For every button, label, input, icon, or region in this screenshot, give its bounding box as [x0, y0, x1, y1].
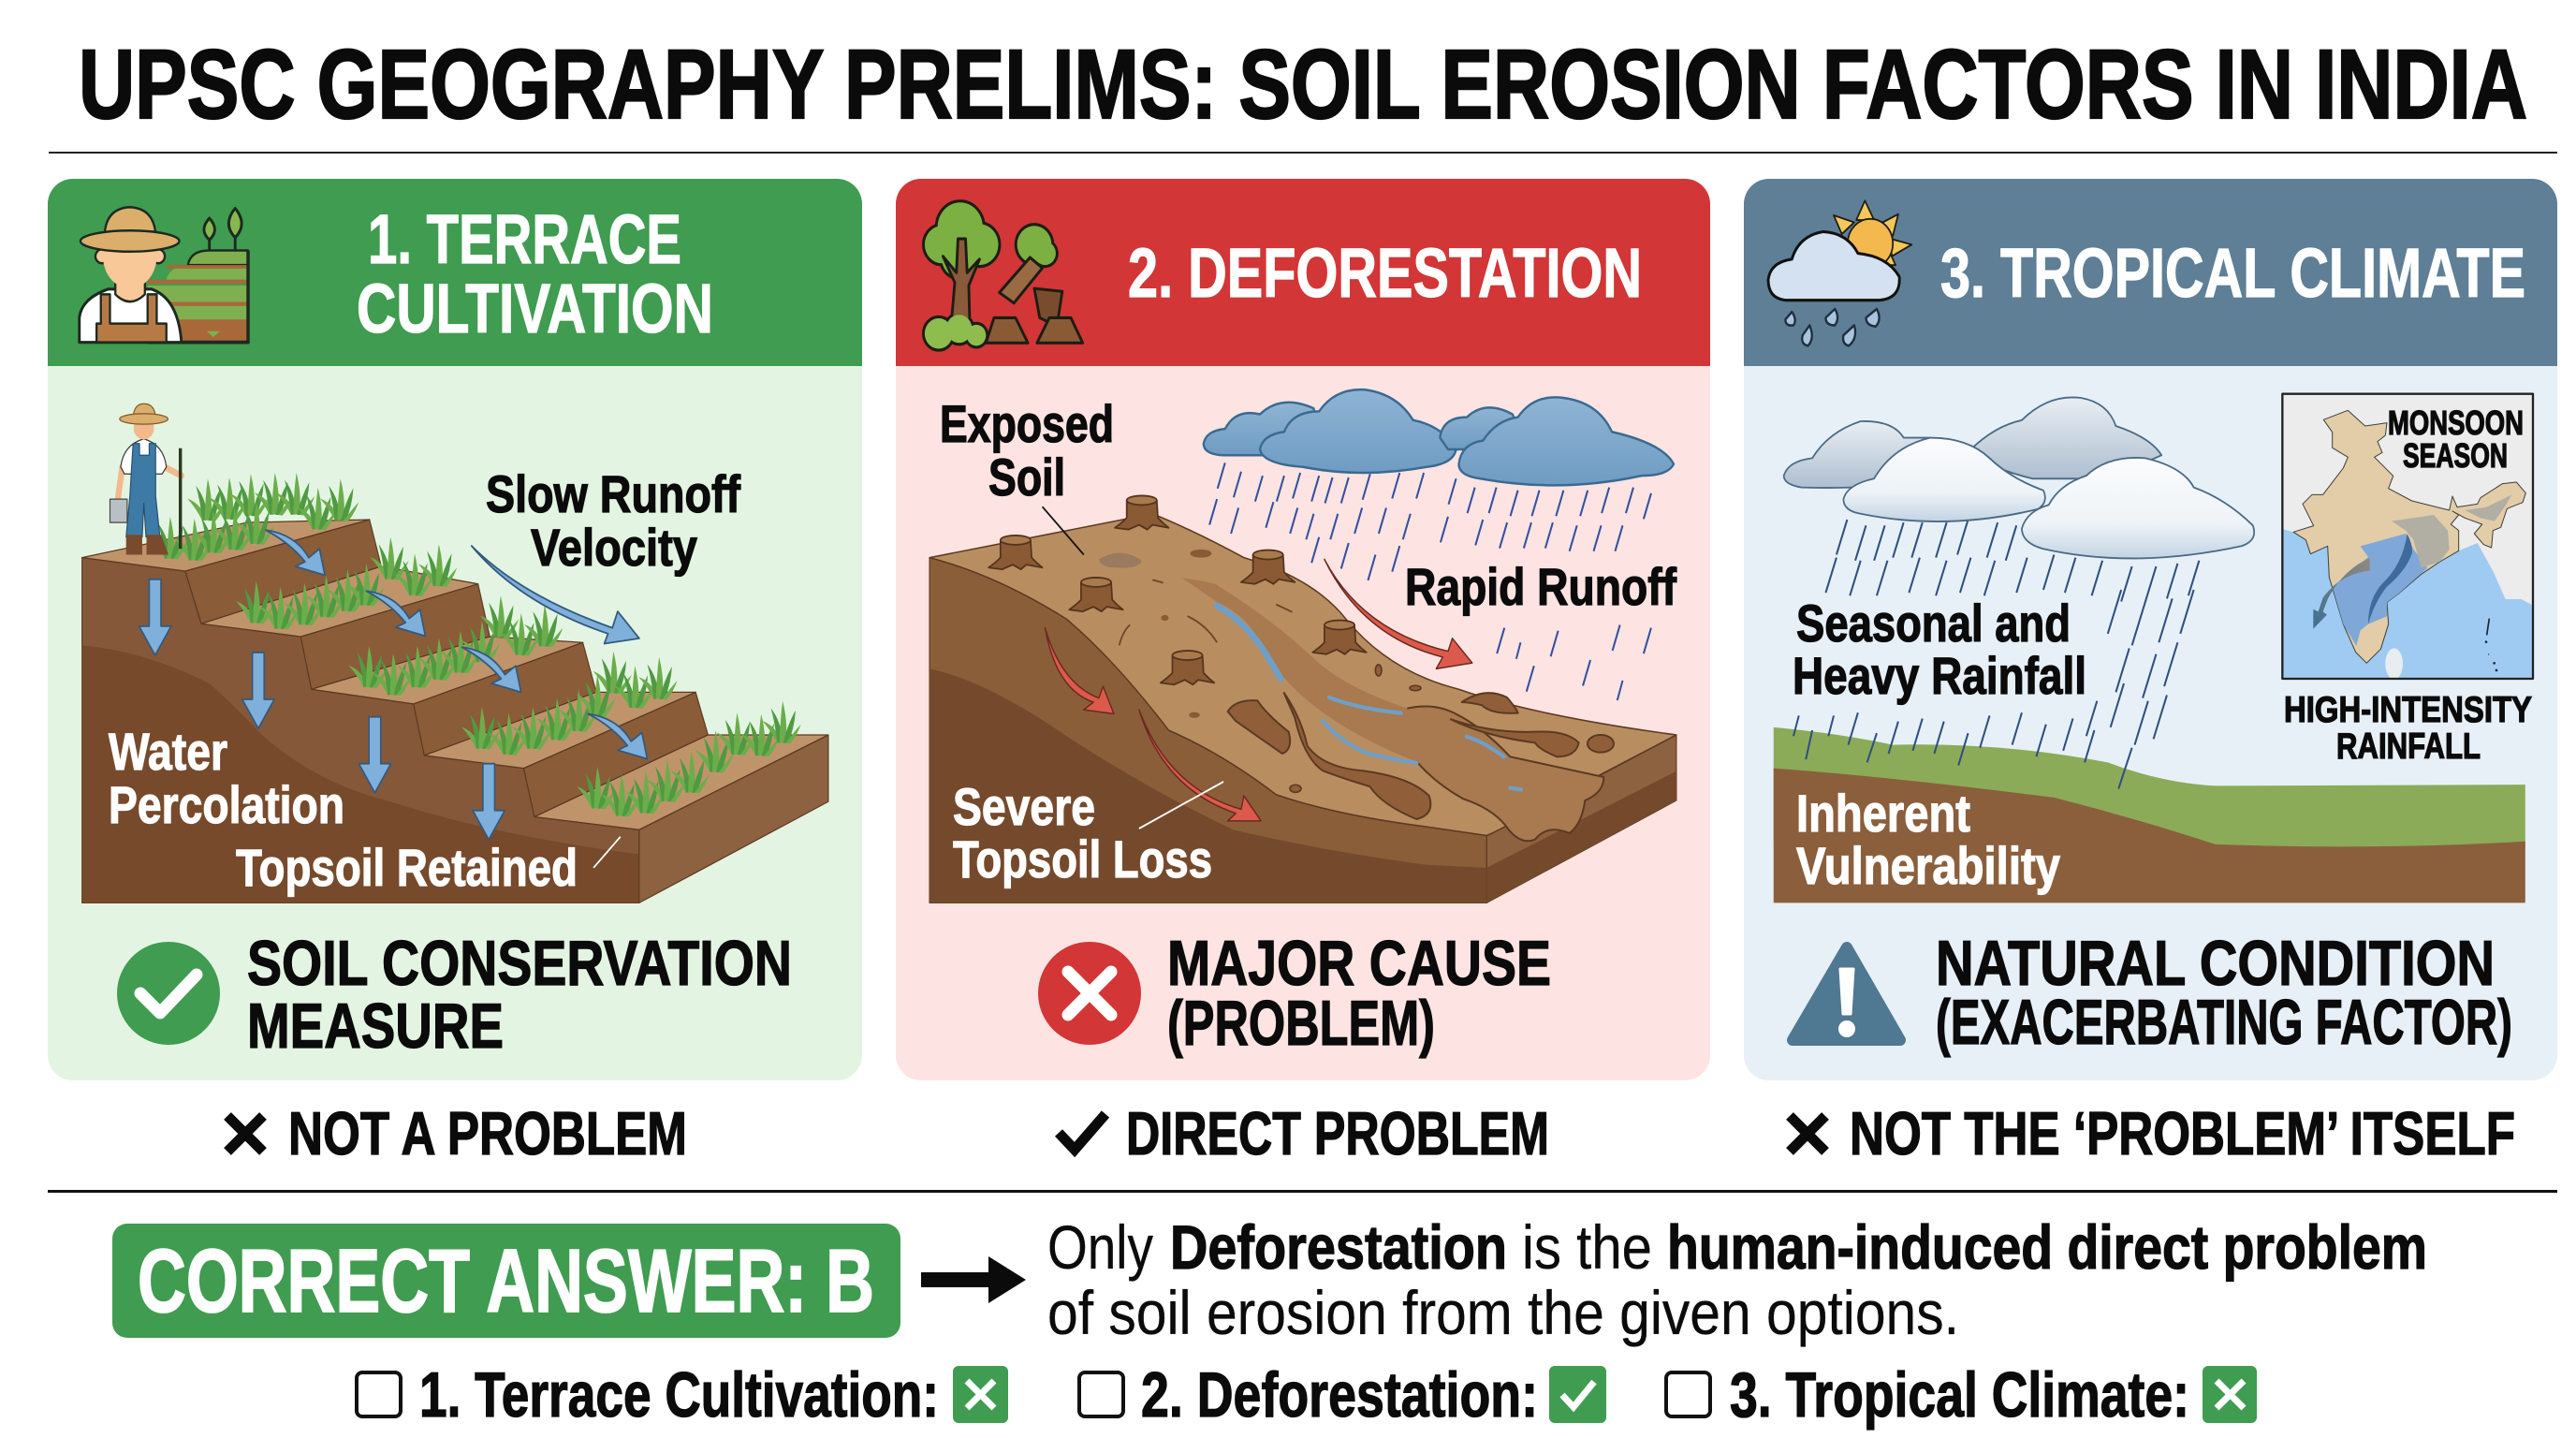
label: water percolation: Water [109, 722, 227, 781]
runoff arrows [266, 530, 325, 575]
panel: tropical climate [1744, 179, 2557, 1080]
option: deforestation: 2. Deforestation: [1141, 1359, 1538, 1431]
icon: trees and stumps [925, 202, 1083, 348]
rain [1209, 462, 1651, 700]
rain [1793, 520, 2199, 788]
illustration: heavy rain on land [1774, 397, 2525, 902]
icon: green check [117, 942, 220, 1045]
label: severe topsoil loss: Severe [953, 777, 1095, 836]
red arrows [1325, 560, 1472, 668]
verdict: direct problem [1059, 1099, 1549, 1167]
status: major cause: (PROBLEM) [1167, 988, 1435, 1059]
label: monsoon season: SEASON [2403, 436, 2508, 475]
icon: sun cloud rain [1768, 200, 1911, 345]
verdict: not a problem: NOT A PROBLEM [288, 1099, 687, 1167]
label: inherent vulnerability: Inherent [1796, 784, 1970, 843]
heading: 1. Terrace Cultivation: 1. TERRACE [368, 200, 681, 278]
label: topsoil retained: Topsoil Retained [236, 838, 578, 897]
heading: 1. Terrace Cultivation [357, 200, 713, 347]
explanation text: is the [1522, 1212, 1652, 1282]
label: slow runoff velocity [486, 464, 740, 577]
clouds [1784, 421, 1947, 488]
label: exposed soil: Exposed [940, 394, 1114, 453]
icon: farmer with terraces [80, 207, 248, 343]
steps [185, 520, 708, 816]
soil front face [82, 558, 639, 902]
label: slow runoff velocity: Velocity [531, 518, 697, 577]
label: seasonal and heavy rainfall [1793, 594, 2086, 705]
stumps [1115, 495, 1168, 530]
surface marks [1099, 553, 1142, 568]
label: exposed soil [940, 394, 1114, 506]
option: terrace cultivation: 1. Terrace Cultivation: [419, 1359, 939, 1431]
label: water percolation [109, 722, 344, 834]
label: high-intensity rainfall: RAINFALL [2336, 726, 2481, 767]
icon: red cross [1038, 942, 1141, 1045]
status: major cause: MAJOR CAUSE [1167, 928, 1551, 999]
label: seasonal and heavy rainfall: Heavy Rainfall [1793, 646, 2086, 705]
explanation text [1047, 1212, 2427, 1347]
answer badge: CORRECT ANSWER: B [138, 1231, 874, 1331]
panel: terrace cultivation [48, 179, 862, 1080]
explanation text: of soil erosion from the given options. [1047, 1278, 1959, 1347]
status: soil conservation measure: SOIL CONSERVATION [247, 928, 792, 999]
label: severe topsoil loss: Topsoil Loss [953, 829, 1212, 888]
icon: warning triangle [1793, 947, 1900, 1040]
panel header: terrace cultivation [48, 179, 862, 366]
panel header: tropical climate [1744, 179, 2557, 366]
status: major cause [1167, 928, 1551, 1059]
heading: 2. Deforestation: 2. DEFORESTATION [1128, 234, 1642, 312]
explanation text: Deforestation [1170, 1212, 1507, 1282]
label: high-intensity rainfall [2284, 690, 2532, 767]
label: exposed soil: Soil [988, 448, 1065, 506]
crops [187, 478, 226, 521]
status: soil conservation measure: MEASURE [247, 990, 504, 1062]
explanation text: Only [1047, 1212, 1153, 1282]
label: monsoon season [2388, 404, 2524, 475]
farmer [118, 466, 182, 497]
label: inherent vulnerability [1796, 784, 2060, 895]
label: high-intensity rainfall: HIGH-INTENSITY [2284, 690, 2532, 730]
label: severe topsoil loss [953, 777, 1212, 888]
answer badge [112, 1224, 900, 1338]
panel header: deforestation [896, 179, 1710, 366]
label: monsoon season: MONSOON [2388, 404, 2524, 442]
verdict: direct problem: DIRECT PROBLEM [1126, 1099, 1549, 1167]
panel: deforestation [896, 179, 1710, 1080]
gully and soil deposits [1217, 585, 1614, 841]
label: water percolation: Percolation [109, 775, 344, 834]
clouds [1204, 403, 1325, 455]
percolation arrows [139, 580, 171, 655]
label: rapid runoff: Rapid Runoff [1405, 557, 1676, 616]
label: inherent vulnerability: Vulnerability [1796, 836, 2060, 895]
land block [929, 558, 1486, 902]
status: soil conservation measure [247, 928, 792, 1062]
illustration: eroding slope with rain [929, 389, 1676, 902]
explanation text: human-induced direct problem [1667, 1212, 2427, 1282]
heading: 1. Terrace Cultivation: CULTIVATION [357, 270, 713, 347]
map: India monsoon [2282, 394, 2533, 680]
label: slow runoff velocity: Slow Runoff [486, 464, 740, 523]
illustration: terraced hillside [82, 404, 828, 902]
label: seasonal and heavy rainfall: Seasonal and [1796, 594, 2071, 653]
option: tropical climate: 3. Tropical Climate: [1730, 1359, 2189, 1431]
arrow [921, 1256, 1026, 1303]
ground layers [1774, 727, 2525, 847]
status: natural condition [1936, 928, 2512, 1058]
